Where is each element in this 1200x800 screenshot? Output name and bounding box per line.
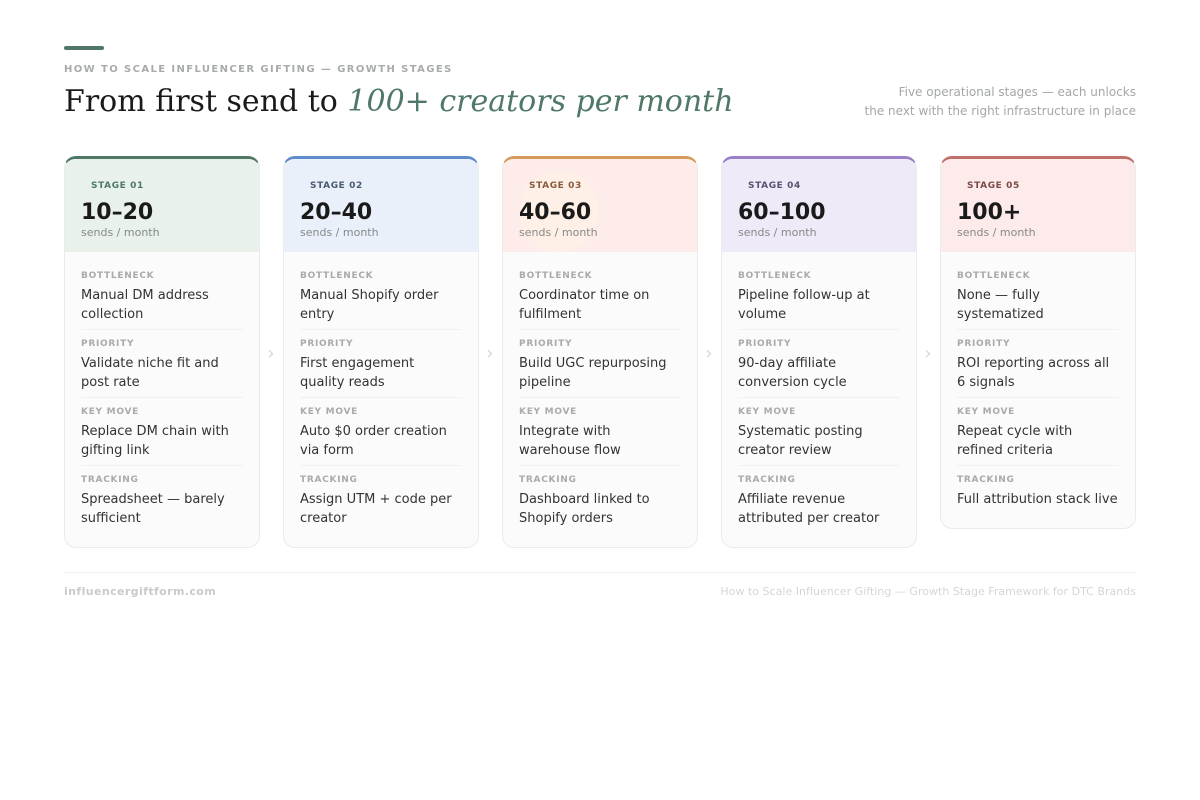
stage 03 tracking: TRACKING — [519, 475, 577, 485]
eyebrow heading: HOW TO SCALE INFLUENCER GIFTING — GROWTH STAGES — [64, 64, 453, 75]
stage 05 priority: 6 signals — [957, 375, 1015, 390]
stage 02 key move: via form — [300, 443, 354, 458]
stage 04 unit: sends / month — [738, 226, 817, 239]
stage 02 tracking: Assign UTM + code per — [300, 492, 452, 507]
stage 02 bottleneck: BOTTLENECK — [300, 271, 373, 281]
stage 05 key move: Repeat cycle with — [957, 424, 1072, 439]
arrow 4 to 5: › — [924, 343, 932, 364]
stage 05 tracking: Full attribution stack live — [957, 492, 1118, 507]
stage 05 header — [941, 159, 1135, 252]
stage 01 content — [81, 271, 243, 526]
stage 02 bottleneck — [300, 262, 462, 330]
subtitle: Five operational stages — each unlocks — [899, 85, 1136, 99]
stage 04 tracking: Affiliate revenue — [738, 492, 845, 507]
stage 01 tracking: TRACKING — [81, 475, 139, 485]
stage 02 range: 20–40 — [300, 200, 372, 225]
stage 05 key move: KEY MOVE — [957, 407, 1015, 417]
stage 01 priority: Validate niche fit and — [81, 356, 219, 371]
stage 02 key move — [300, 398, 462, 466]
stage 03 priority: PRIORITY — [519, 339, 572, 349]
stage 01 key move: Replace DM chain with — [81, 424, 229, 439]
stage 04 tracking: TRACKING — [738, 475, 796, 485]
stage 01 tracking: sufficient — [81, 511, 141, 526]
stage 01 priority: PRIORITY — [81, 339, 134, 349]
arrow 2 to 3: › — [486, 343, 494, 364]
stage 01 bottleneck: collection — [81, 307, 143, 322]
stage 02 key move: Auto $0 order creation — [300, 424, 447, 439]
panel: stage 01 — [64, 156, 260, 548]
stage 05 bottleneck: BOTTLENECK — [957, 271, 1030, 281]
stage 02 key move: KEY MOVE — [300, 407, 358, 417]
stage 04 label: STAGE 04 — [748, 181, 801, 191]
stage 03 priority: Build UGC repurposing — [519, 356, 667, 371]
stage 01 unit: sends / month — [81, 226, 160, 239]
stage 03 key move — [519, 398, 681, 466]
stage 05 key move — [957, 398, 1119, 466]
stage 03 highlight blob — [520, 173, 598, 252]
stage 05 key move: refined criteria — [957, 443, 1053, 458]
stage 01 key move: gifting link — [81, 443, 150, 458]
stage 05 unit: sends / month — [957, 226, 1036, 239]
footer brand: influencergiftform.com — [64, 585, 216, 598]
stage 03 bottleneck: fulfilment — [519, 307, 581, 322]
accent bar — [64, 46, 104, 50]
stage 02 priority: PRIORITY — [300, 339, 353, 349]
stage 04 bottleneck: Pipeline follow-up at — [738, 288, 870, 303]
stage 04 content — [738, 271, 900, 526]
stage 05 tracking — [957, 475, 1118, 507]
stage 03 content — [519, 271, 681, 526]
stage 04 tracking: attributed per creator — [738, 511, 879, 526]
stage 01 bottleneck: Manual DM address — [81, 288, 209, 303]
stage 01 tracking: Spreadsheet — barely — [81, 492, 225, 507]
stage 03 tracking: Dashboard linked to — [519, 492, 650, 507]
stage 04 tracking — [738, 475, 880, 526]
stage 03 key move: KEY MOVE — [519, 407, 577, 417]
stage 03 bottleneck: Coordinator time on — [519, 288, 649, 303]
panel: stage 04 — [721, 156, 917, 548]
stage 03 key move: warehouse flow — [519, 443, 621, 458]
stage 03 priority: pipeline — [519, 375, 571, 390]
stage 05 content — [957, 271, 1119, 507]
subtitle — [864, 85, 1136, 118]
stage 05 label: STAGE 05 — [967, 181, 1020, 191]
stage 04 bottleneck: volume — [738, 307, 786, 322]
panel: stage 03 — [502, 156, 698, 548]
stage 04 priority: PRIORITY — [738, 339, 791, 349]
stage 02 bottleneck: Manual Shopify order — [300, 288, 439, 303]
stage 02 priority — [300, 330, 462, 398]
stage 05 bottleneck — [957, 262, 1119, 330]
stage 02 header — [284, 159, 478, 252]
stage 03 tracking: Shopify orders — [519, 511, 613, 526]
arrow 1 to 2: › — [267, 343, 275, 364]
stage 03 bottleneck — [519, 262, 681, 330]
stage 01 priority — [81, 330, 243, 398]
stage 02 tracking — [300, 475, 452, 526]
stage 04 key move: KEY MOVE — [738, 407, 796, 417]
arrow 3 to 4: › — [705, 343, 713, 364]
stage 05 bottleneck: systematized — [957, 307, 1044, 322]
stage 02 tracking: creator — [300, 511, 347, 526]
stage 03 priority — [519, 330, 681, 398]
stage 05 range: 100+ — [957, 200, 1021, 225]
stage 05 tracking: TRACKING — [957, 475, 1015, 485]
stage 02 priority: First engagement — [300, 356, 414, 371]
stage 01 label: STAGE 01 — [91, 181, 144, 191]
stage 01 tracking — [81, 475, 225, 526]
stage 05 bottleneck: None — fully — [957, 288, 1040, 303]
title: From first send to 100+ creators per month — [64, 84, 734, 119]
stage 05 priority: PRIORITY — [957, 339, 1010, 349]
stage 02 bottleneck: entry — [300, 307, 334, 322]
stage 04 key move: creator review — [738, 443, 832, 458]
stage 04 key move: Systematic posting — [738, 424, 863, 439]
stage 04 priority — [738, 330, 900, 398]
stage 02 priority: quality reads — [300, 375, 385, 390]
stage 04 priority: conversion cycle — [738, 375, 847, 390]
stage 03 range: 40–60 — [519, 200, 591, 225]
stage 01 header — [65, 159, 259, 252]
stage 02 label: STAGE 02 — [310, 181, 363, 191]
stage 03 bottleneck: BOTTLENECK — [519, 271, 592, 281]
stage 02 tracking: TRACKING — [300, 475, 358, 485]
stage 04 bottleneck: BOTTLENECK — [738, 271, 811, 281]
stage 01 bottleneck — [81, 262, 243, 330]
stage 03 label: STAGE 03 — [529, 181, 582, 191]
stage 01 key move: KEY MOVE — [81, 407, 139, 417]
stage 03 unit: sends / month — [519, 226, 598, 239]
stage 04 bottleneck — [738, 262, 900, 330]
stage 01 bottleneck: BOTTLENECK — [81, 271, 154, 281]
stage 01 key move — [81, 398, 243, 466]
stage 03 key move: Integrate with — [519, 424, 611, 439]
stage 03 tracking — [519, 475, 650, 526]
stage 01 priority: post rate — [81, 375, 140, 390]
panel: stage 05 — [940, 156, 1136, 529]
panel: stage 02 — [283, 156, 479, 548]
stage 03 header — [503, 159, 697, 252]
stage 02 content — [300, 271, 462, 526]
footer caption: How to Scale Influencer Gifting — Growth Stage Framework for DTC Brands — [720, 585, 1136, 598]
stage 05 priority: ROI reporting across all — [957, 356, 1109, 371]
stage 02 unit: sends / month — [300, 226, 379, 239]
subtitle: the next with the right infrastructure in place — [865, 104, 1136, 118]
stage 04 priority: 90-day affiliate — [738, 356, 836, 371]
stage 05 priority — [957, 330, 1119, 398]
stage 04 key move — [738, 398, 900, 466]
stage 04 header — [722, 159, 916, 252]
stage 01 range: 10–20 — [81, 200, 153, 225]
stage 04 range: 60–100 — [738, 200, 826, 225]
